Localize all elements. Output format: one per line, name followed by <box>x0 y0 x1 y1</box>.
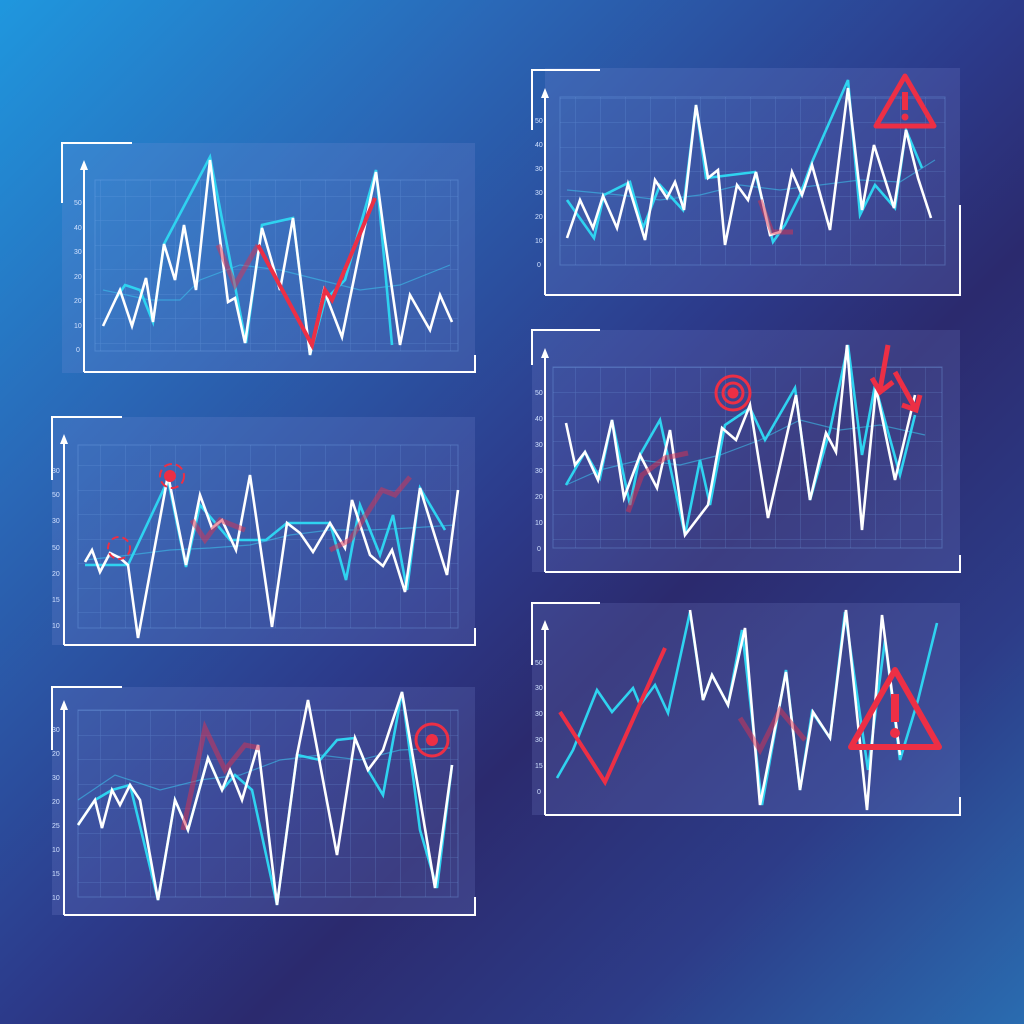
panel: chart middle-right: 50 <box>535 390 543 397</box>
panel: chart bottom-left: 10 <box>52 895 60 902</box>
icon: large warning triangle <box>851 670 939 747</box>
axis labels: 50 <box>74 200 82 207</box>
panel: chart top-right: 10 <box>535 238 543 245</box>
panel: chart middle-left: 20 <box>52 571 60 578</box>
panel: chart middle-right: 30 <box>535 468 543 475</box>
icon: target <box>416 724 448 756</box>
panel: chart middle-right: 10 <box>535 520 543 527</box>
panel: chart top-right: 30 <box>535 166 543 173</box>
panel: chart top-right <box>532 68 960 295</box>
panel: chart bottom-right: 0 <box>537 789 541 796</box>
panel: chart top-right: 20 <box>535 214 543 221</box>
panel: chart middle-left <box>52 417 475 645</box>
axis labels: 10 <box>74 323 82 330</box>
panel: chart top-right: 50 <box>535 118 543 125</box>
axis labels: 20 <box>74 298 82 305</box>
panel: chart top-right: 40 <box>535 142 543 149</box>
panel: chart bottom-left: 30 <box>52 775 60 782</box>
axis labels <box>74 200 82 354</box>
panel: chart bottom-right: 50 <box>535 660 543 667</box>
axis labels: 40 <box>74 225 82 232</box>
panel: chart middle-left: 30 <box>52 518 60 525</box>
panel: chart bottom-right: 15 <box>535 763 543 770</box>
panel: chart middle-right: 40 <box>535 416 543 423</box>
panel: chart bottom-left: 30 <box>52 727 60 734</box>
panel: chart bottom-left: 20 <box>52 751 60 758</box>
icon: down arrows <box>872 345 920 410</box>
panel: chart bottom-right: 30 <box>535 711 543 718</box>
panel: chart middle-left: 50 <box>52 545 60 552</box>
panel: chart top-right: 30 <box>535 190 543 197</box>
panel: chart middle-right <box>532 330 960 572</box>
panel: chart middle-left: 10 <box>52 623 60 630</box>
panel: chart middle-left: 15 <box>52 597 60 604</box>
icon: warning triangle <box>876 76 934 126</box>
panel: chart bottom-left: 15 <box>52 871 60 878</box>
axis labels: 30 <box>74 249 82 256</box>
panel: chart bottom-left: 25 <box>52 823 60 830</box>
axis labels: 0 <box>76 347 80 354</box>
panel: chart bottom-right: 30 <box>535 737 543 744</box>
panel: chart middle-left: 30 <box>52 468 60 475</box>
panel: chart top-left <box>62 143 475 373</box>
panel: chart bottom-left: 20 <box>52 799 60 806</box>
panel: chart bottom-right <box>532 603 960 815</box>
panel: chart top-right: 0 <box>537 262 541 269</box>
panel: chart middle-left: 50 <box>52 492 60 499</box>
panel: chart bottom-left <box>52 687 475 915</box>
panel: chart middle-right: 30 <box>535 442 543 449</box>
panel: chart bottom-right: 30 <box>535 685 543 692</box>
panel: chart middle-right: 20 <box>535 494 543 501</box>
axis labels: 20 <box>74 274 82 281</box>
icon: concentric target <box>716 376 750 410</box>
panel: chart bottom-left: 10 <box>52 847 60 854</box>
panel: chart middle-right: 0 <box>537 546 541 553</box>
icon: target markers <box>108 464 184 559</box>
